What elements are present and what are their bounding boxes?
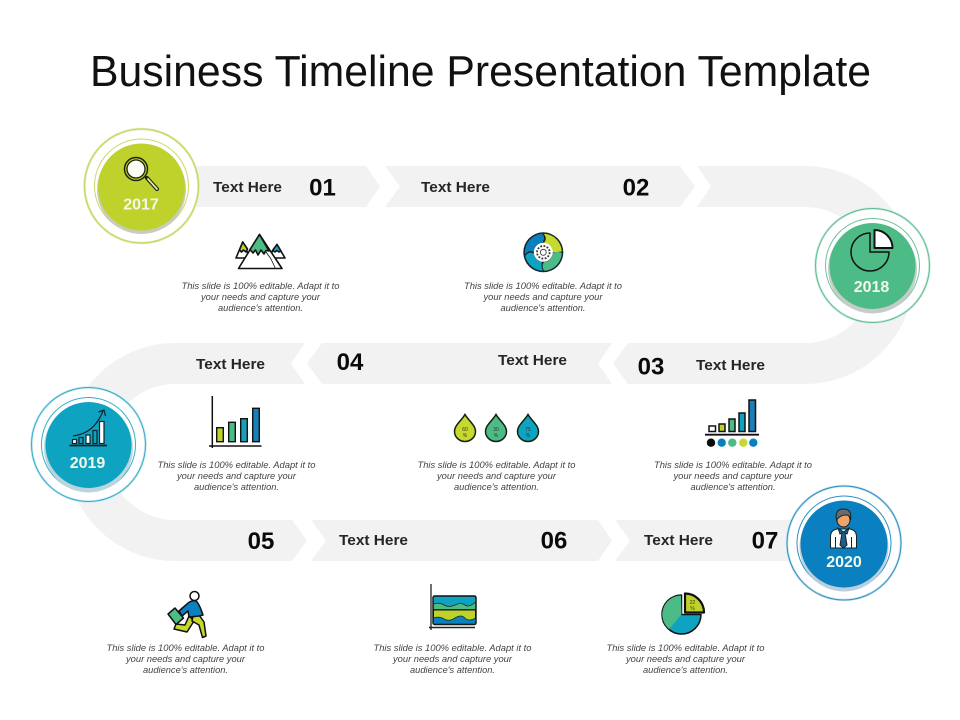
icon: percentage drops: % bbox=[494, 433, 499, 439]
step 01 label bbox=[213, 174, 336, 202]
icon: magnifier bbox=[124, 158, 157, 189]
icon: percentage drops: 30 bbox=[493, 427, 499, 433]
text: step 03 description: This slide is 100% editable. Adapt it to bbox=[654, 460, 812, 470]
icon: percentage drops: 60 bbox=[462, 427, 468, 433]
text: left row description: your needs and capture your bbox=[176, 471, 297, 481]
text: step 04 description: This slide is 100% editable. Adapt it to bbox=[418, 460, 576, 470]
step 03 label bbox=[638, 354, 765, 380]
year badge 2017: 2017 bbox=[123, 196, 159, 214]
icon: rising bars bbox=[70, 410, 107, 446]
text: step 01 description: This slide is 100% editable. Adapt it to bbox=[182, 281, 340, 291]
icon: mountains bbox=[236, 234, 285, 268]
text: step 01 description bbox=[182, 281, 340, 313]
icon: pie with percentage: 22 bbox=[690, 600, 695, 606]
step 01 label: 01 bbox=[309, 174, 336, 202]
text: step 07 description: your needs and capture your bbox=[625, 654, 746, 664]
icon: bar chart with dots bbox=[705, 400, 759, 447]
icon: running businessman bbox=[168, 592, 206, 638]
year badge 2017 bbox=[84, 129, 198, 243]
text: step 06 description: your needs and capture your bbox=[392, 654, 513, 664]
text: step 03 description bbox=[654, 460, 812, 492]
year badge 2018 bbox=[816, 208, 930, 322]
step 02 label bbox=[421, 174, 649, 202]
step 07 label: Text Here bbox=[644, 532, 713, 549]
step 03 label: Text Here bbox=[696, 357, 765, 374]
text: step 07 description: audience's attention. bbox=[643, 665, 728, 675]
year badge 2020: 2020 bbox=[826, 554, 862, 571]
text: step 01 description: your needs and capture your bbox=[200, 292, 321, 302]
step 02 label: Text Here bbox=[421, 179, 490, 196]
step 03 label: 03 bbox=[638, 354, 664, 380]
text: left row description: audience's attention. bbox=[194, 482, 279, 492]
text: step 02 description: your needs and capture your bbox=[482, 292, 603, 302]
step 04 label bbox=[337, 349, 567, 376]
icon: percentage drops bbox=[454, 414, 538, 442]
step 02 label: 02 bbox=[623, 174, 649, 202]
text: left row description: This slide is 100% editable. Adapt it to bbox=[158, 460, 316, 470]
step 06 label bbox=[339, 528, 567, 554]
text: step 07 description: This slide is 100% editable. Adapt it to bbox=[606, 643, 764, 653]
title: Business Timeline Presentation Template bbox=[90, 47, 871, 96]
year badge 2019: 2019 bbox=[70, 455, 105, 472]
step 05 number: 05 bbox=[248, 528, 274, 555]
icon: pie chart bbox=[851, 230, 892, 271]
step 04 label: 04 bbox=[337, 349, 364, 376]
year badge 2019 bbox=[32, 388, 146, 502]
text: step 05 description bbox=[106, 643, 264, 675]
step 07 label: 07 bbox=[752, 528, 778, 554]
step 07 label bbox=[644, 528, 778, 554]
text: step 02 description: This slide is 100% editable. Adapt it to bbox=[464, 281, 622, 291]
icon: percentage drops: 75 bbox=[525, 427, 531, 433]
left row label: Text Here bbox=[196, 356, 265, 373]
text: step 04 description bbox=[418, 460, 576, 492]
text: step 06 description: This slide is 100% editable. Adapt it to bbox=[374, 643, 532, 653]
icon: axis bar chart bbox=[209, 396, 262, 448]
text: step 02 description: audience's attention. bbox=[500, 303, 586, 313]
text: step 01 description: audience's attention. bbox=[218, 303, 303, 313]
timeline track bbox=[66, 166, 914, 561]
text: step 04 description: your needs and capture your bbox=[436, 471, 557, 481]
icon: percentage drops: % bbox=[526, 433, 531, 439]
step 04 label: Text Here bbox=[498, 352, 567, 369]
year badge 2018: 2018 bbox=[854, 279, 889, 296]
year badge 2020 bbox=[787, 486, 901, 600]
text: step 02 description bbox=[464, 281, 622, 313]
step 01 label: Text Here bbox=[213, 179, 282, 196]
text: step 07 description bbox=[606, 643, 764, 675]
text: step 03 description: your needs and capture your bbox=[672, 471, 793, 481]
icon: area chart bbox=[429, 584, 476, 630]
step 06 label: Text Here bbox=[339, 532, 408, 549]
text: step 06 description bbox=[374, 643, 532, 675]
text: step 05 description: your needs and capture your bbox=[125, 654, 246, 664]
text: step 05 description: This slide is 100% editable. Adapt it to bbox=[106, 643, 264, 653]
text: step 04 description: audience's attention. bbox=[454, 482, 539, 492]
icon: percentage drops: % bbox=[463, 433, 468, 439]
step 06 label: 06 bbox=[541, 528, 567, 554]
icon: pie with percentage bbox=[662, 594, 704, 634]
text: step 05 description: audience's attention. bbox=[143, 665, 228, 675]
text: step 03 description: audience's attention. bbox=[690, 482, 776, 492]
icon: pie with percentage: % bbox=[690, 606, 695, 612]
icon: businessman bbox=[830, 509, 856, 548]
text: step 06 description: audience's attention. bbox=[410, 665, 495, 675]
icon: gear ring bbox=[523, 232, 563, 272]
text: left row description bbox=[158, 460, 316, 492]
